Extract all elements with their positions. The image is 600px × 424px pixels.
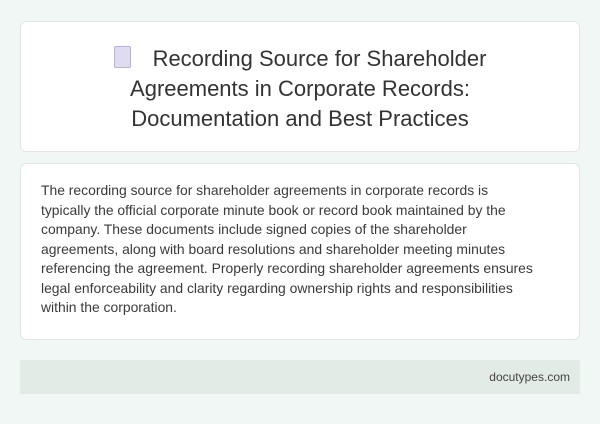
body text card bbox=[20, 163, 580, 340]
icon: document scroll bbox=[114, 46, 131, 68]
title card bbox=[20, 21, 580, 152]
title: Recording Source for Shareholder Agreements in Corporate Records: Documentation and Best Practices bbox=[130, 46, 486, 131]
footer bar bbox=[20, 360, 580, 394]
description paragraph: The recording source for shareholder agreements in corporate records is typically the official corporate minute book or record book maintained by the company. These documents include signed copies of the shareholder agreements, along with board resolutions and shareholder meeting minutes referencing the agreement. Properly recording shareholder agreements ensures legal enforceability and clarity regarding ownership rights and responsibilities within the corporation. bbox=[41, 182, 533, 315]
footer source text: docutypes.com bbox=[489, 370, 570, 384]
